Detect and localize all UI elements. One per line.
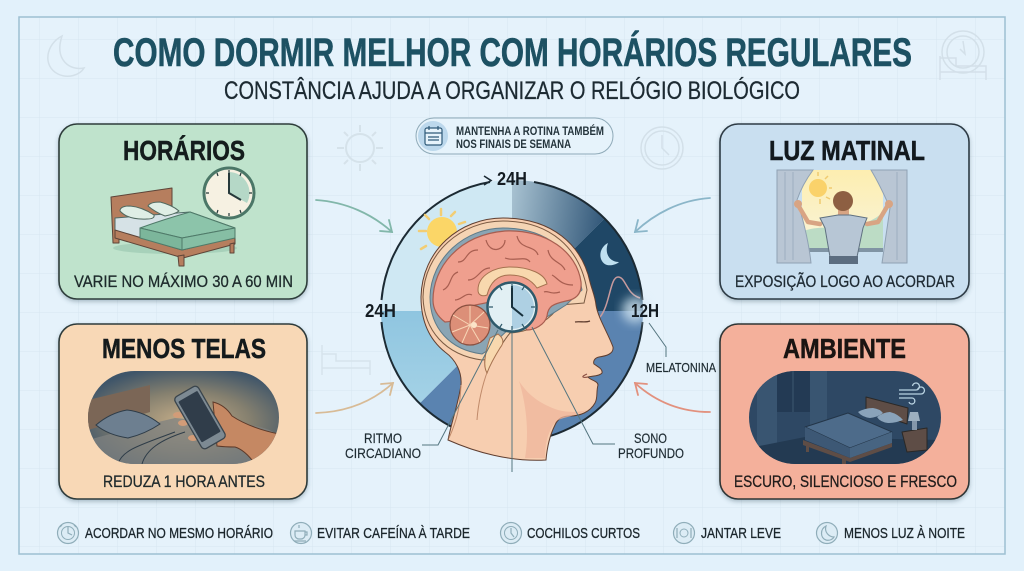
icon: clock xyxy=(204,168,254,218)
icon: hand xyxy=(173,402,279,464)
icon: biological clock xyxy=(488,282,536,332)
central diagram: head and circadian clock xyxy=(345,169,717,472)
tip: acordar: ACORDAR NO MESMO HORÁRIO xyxy=(85,525,273,542)
label: sono profundo: PROFUNDO xyxy=(618,445,684,461)
illustration: phone in bed xyxy=(88,371,279,464)
label: 24H top: 24H xyxy=(497,169,527,189)
icon: faint bed xyxy=(322,345,370,375)
label: ritmo circadiano: CIRCADIANO xyxy=(345,445,421,461)
arrow: luz matinal to centre xyxy=(635,198,710,232)
head silhouette xyxy=(421,218,613,460)
tip: cafeína: EVITAR CAFEÍNA À TARDE xyxy=(317,525,470,542)
icon: wind xyxy=(899,383,924,404)
brain xyxy=(433,231,581,330)
label: melatonina: MELATONINA xyxy=(646,361,717,375)
tip: cochilos: COCHILOS CURTOS xyxy=(527,525,640,542)
icon: faint sun xyxy=(337,125,383,171)
heading: menos telas: MENOS TELAS xyxy=(102,333,266,364)
icon: bed xyxy=(111,188,237,266)
heading: ambiente: AMBIENTE xyxy=(783,333,906,364)
icon: moon xyxy=(600,243,619,265)
panel: menos telas xyxy=(59,324,307,499)
brainstem xyxy=(485,334,503,373)
label: ritmo circadiano: RITMO xyxy=(364,430,402,446)
heading: luz matinal: LUZ MATINAL xyxy=(769,135,925,166)
caption: menos telas: REDUZA 1 HORA ANTES xyxy=(103,472,265,491)
arrow: horários to centre xyxy=(316,200,392,232)
icon: sun xyxy=(809,172,832,204)
tip: acordar xyxy=(58,522,273,544)
icon: calendar xyxy=(418,121,448,151)
melatonin curve xyxy=(600,277,640,317)
icon: faint moon xyxy=(48,36,84,76)
corpus callosum xyxy=(478,267,547,296)
skull layers xyxy=(423,221,587,360)
tip: menos luz: MENOS LUZ À NOITE xyxy=(844,525,965,542)
heading: horários: HORÁRIOS xyxy=(123,135,245,166)
tip: menos luz xyxy=(816,522,965,544)
arrow: menos telas to centre xyxy=(316,383,393,413)
tip: cafeína xyxy=(290,522,470,544)
panel: horários xyxy=(59,124,307,299)
label: 24H left: 24H xyxy=(365,301,396,321)
caption: ambiente: ESCURO, SILENCIOSO E FRESCO xyxy=(734,472,957,491)
tip: cochilos xyxy=(500,522,640,544)
day and night ring xyxy=(381,176,643,442)
icon: phone xyxy=(173,385,227,450)
glow behind 12H xyxy=(622,297,648,323)
label: 12H right: 12H xyxy=(631,301,659,321)
arrow: ambiente to centre xyxy=(635,383,710,412)
callout leader lines xyxy=(422,323,666,472)
label: sono profundo: SONO xyxy=(634,430,667,446)
illustration: dark bedroom xyxy=(749,371,941,464)
illustration: person opening curtains xyxy=(777,170,907,264)
bottom tips row xyxy=(58,522,965,544)
icon: faint clock and bed xyxy=(940,31,986,80)
icon: sun xyxy=(419,209,465,249)
panel: ambiente xyxy=(720,324,969,499)
label: ritmo circadiano xyxy=(345,430,421,461)
panel: luz matinal xyxy=(720,124,969,299)
cerebellum xyxy=(450,305,490,345)
subtitle: CONSTÂNCIA AJUDA A ORGANIZAR O RELÓGIO BIOLÓGICO xyxy=(224,76,800,105)
label: sono profundo xyxy=(618,430,684,461)
caption: luz matinal: EXPOSIÇÃO LOGO AO ACORDAR xyxy=(735,272,955,291)
icon: faint clock xyxy=(641,127,683,169)
callout pill: weekend routine xyxy=(416,118,613,154)
tip: jantar: JANTAR LEVE xyxy=(701,525,781,542)
caption: horários: VARIE NO MÁXIMO 30 A 60 MIN xyxy=(74,272,293,291)
callout pill: weekend routine: NOS FINAIS DE SEMANA xyxy=(456,139,571,151)
callout pill: weekend routine: MANTENHA A ROTINA TAMBÉM xyxy=(456,125,604,138)
tip: jantar xyxy=(674,522,781,544)
